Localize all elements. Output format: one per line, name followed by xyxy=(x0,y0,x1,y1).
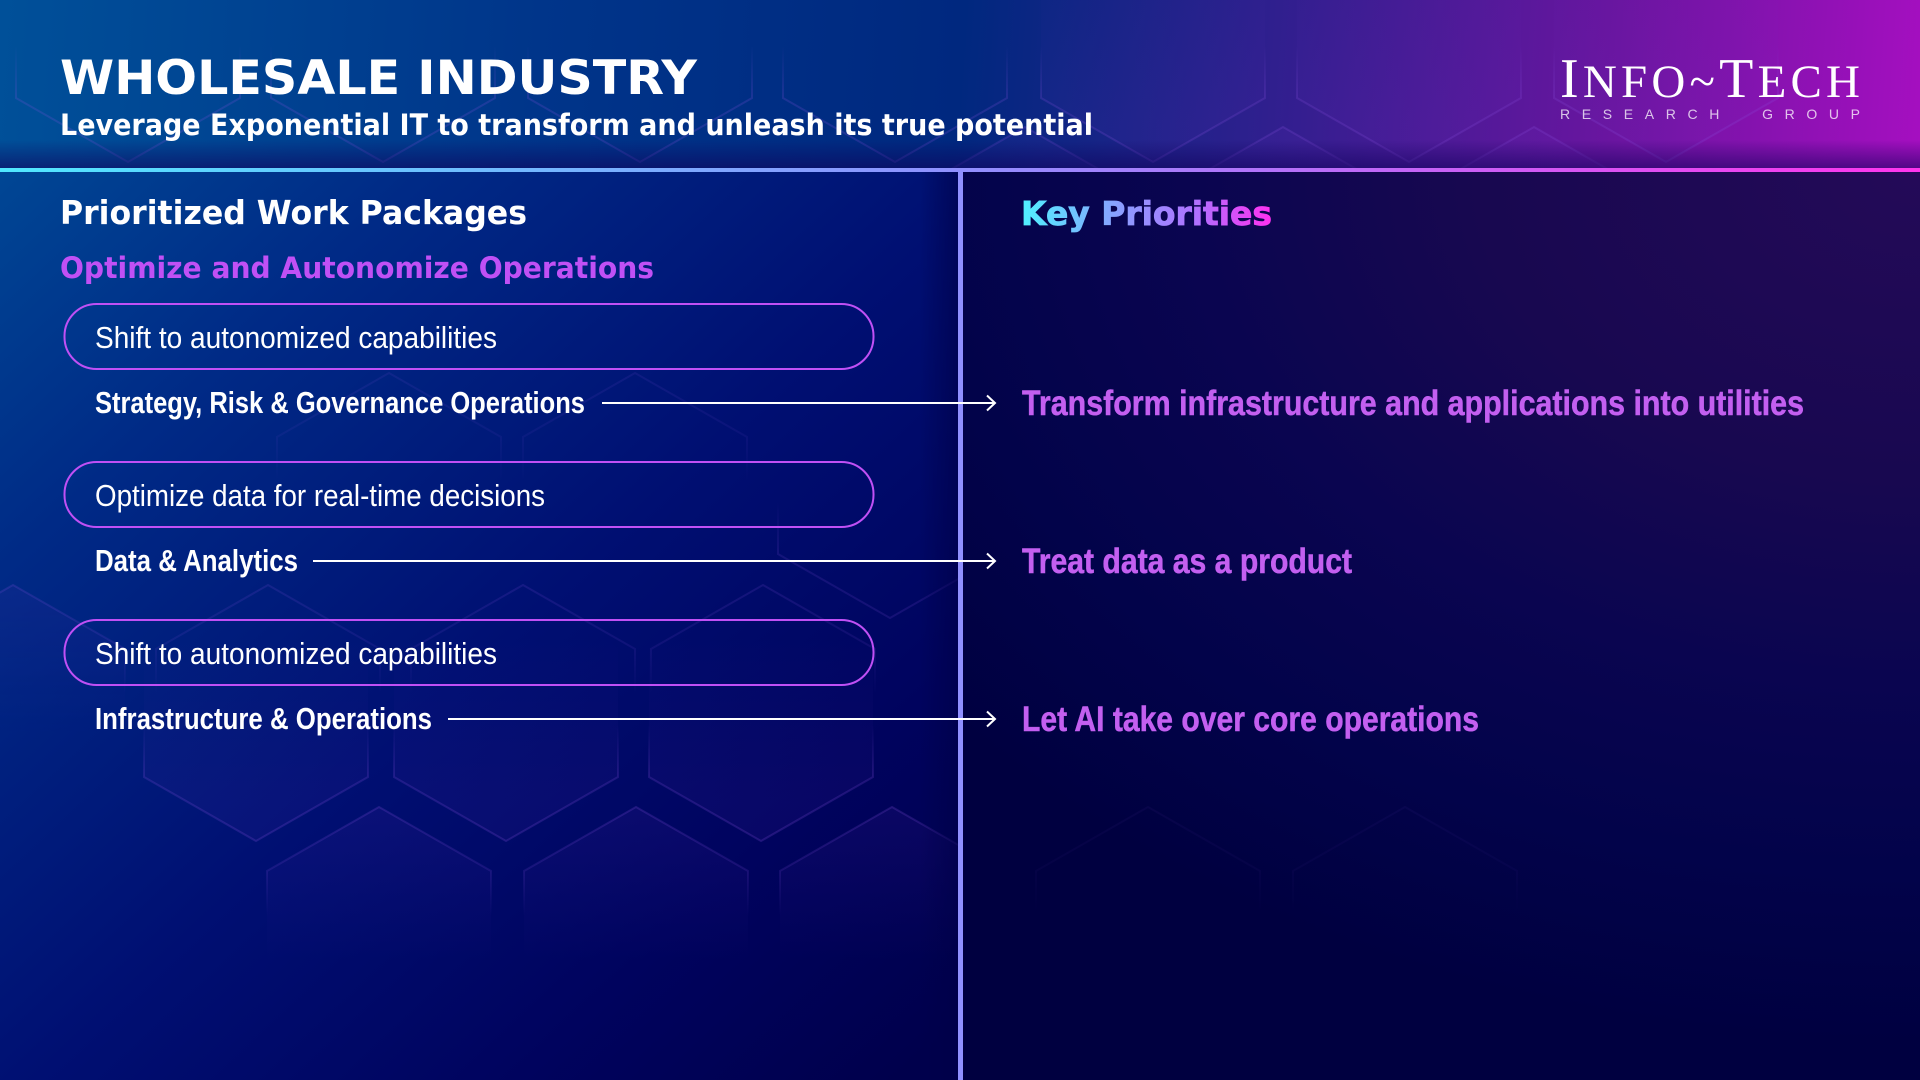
panel: right background xyxy=(963,172,1920,906)
priority: Transform infrastructure and applications into utilities: Transform infrastructure and applications into utilities xyxy=(1022,384,1804,423)
work package 3 xyxy=(64,620,1479,739)
subtitle: Leverage Exponential IT to transform and unleash its true potential xyxy=(60,108,1093,142)
heading: Prioritized Work Packages: Prioritized Work Packages xyxy=(60,193,527,232)
arrow 3 xyxy=(448,712,995,726)
pill: Shift to autonomized capabilities: Shift to autonomized capabilities xyxy=(95,636,497,671)
work package 2 xyxy=(64,462,1352,581)
vertical divider xyxy=(958,172,963,1080)
label: Data & Analytics: Data & Analytics xyxy=(95,543,298,578)
label: Infrastructure & Operations: Infrastructure & Operations xyxy=(95,701,432,736)
panel: header background xyxy=(0,0,1920,168)
subheading: Optimize and Autonomize Operations: Optimize and Autonomize Operations xyxy=(60,251,654,285)
heading: Key Priorities: Key Priorities xyxy=(1021,194,1272,233)
work package 1 xyxy=(64,304,1804,423)
arrow 1 xyxy=(602,396,995,410)
pill: Optimize data for real-time decisions xyxy=(64,462,874,527)
pill: Shift to autonomized capabilities: Shift to autonomized capabilities xyxy=(95,320,497,355)
pill: Shift to autonomized capabilities xyxy=(64,304,874,369)
pill: Shift to autonomized capabilities xyxy=(64,620,874,685)
priority: Let AI take over core operations: Let AI take over core operations xyxy=(1022,700,1479,739)
title: WHOLESALE INDUSTRY xyxy=(60,51,698,106)
header gradient rule xyxy=(0,168,1920,172)
arrow 2 xyxy=(313,554,995,568)
priority: Treat data as a product: Treat data as a product xyxy=(1022,542,1352,581)
panel: left background xyxy=(0,172,1004,1080)
logo: Info-Tech Research Group: INFO~TECH xyxy=(1560,48,1860,110)
logo: Info-Tech Research Group: RESEARCH GROUP xyxy=(1560,106,1860,122)
label: Strategy, Risk & Governance Operations: Strategy, Risk & Governance Operations xyxy=(95,385,585,420)
pill: Optimize data for real-time decisions: Optimize data for real-time decisions xyxy=(95,478,545,513)
